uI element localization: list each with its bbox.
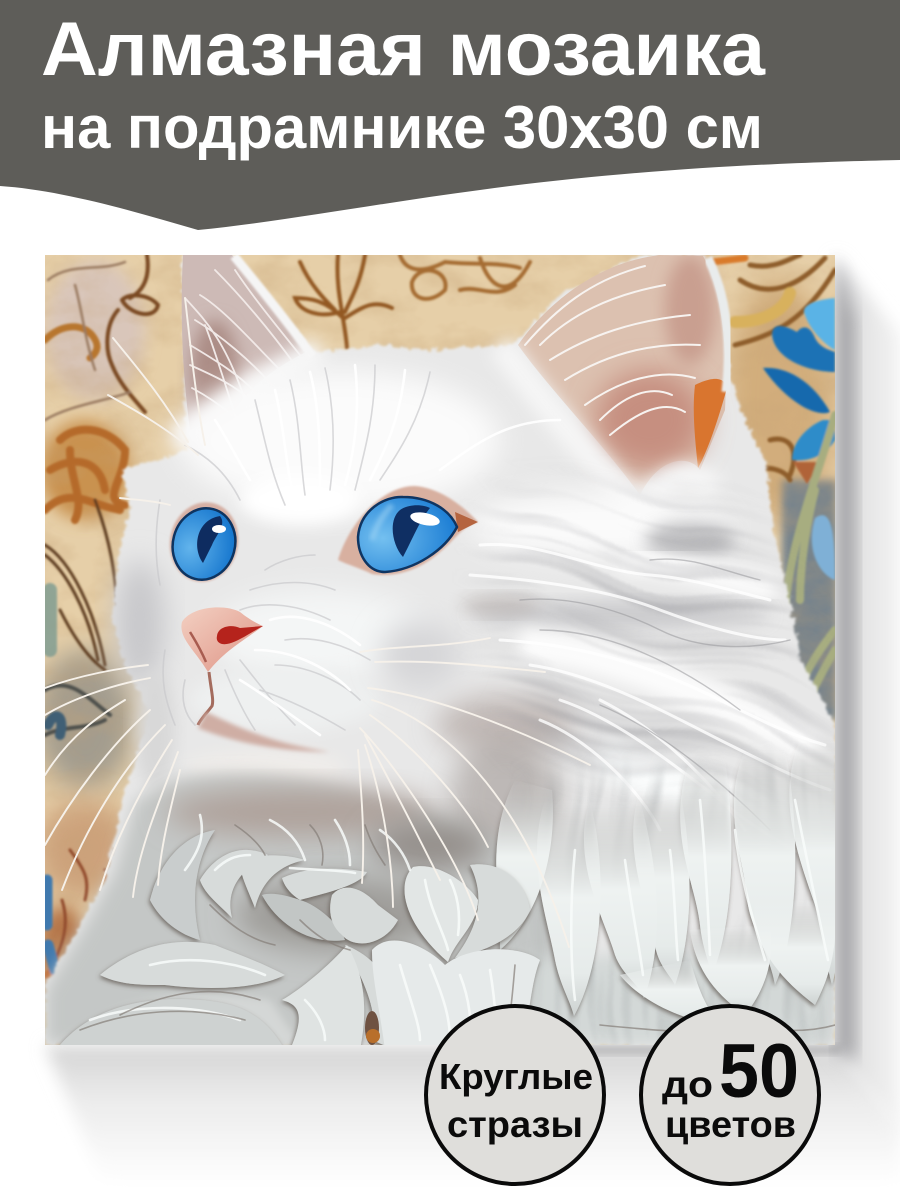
pendant xyxy=(365,1011,380,1045)
canvas drop shadow xyxy=(45,255,900,1200)
vertical streaks xyxy=(549,762,825,1044)
badge: up to 50 colours: 50 xyxy=(719,1029,799,1114)
chest fur xyxy=(45,752,835,1045)
long mane tufts xyxy=(496,740,847,1025)
background floral scrolls xyxy=(45,255,835,995)
badge: up to 50 colours: до xyxy=(662,1064,713,1105)
head fur strands xyxy=(156,365,560,735)
chest tufts xyxy=(60,830,540,1050)
badge: up to 50 colours xyxy=(641,1006,819,1184)
subtitle: на подрамнике 30х30 см xyxy=(41,94,763,161)
header banner xyxy=(0,0,900,230)
blue flowers xyxy=(763,298,835,720)
badge: round rhinestones: Круглые xyxy=(439,1056,593,1097)
whiskers xyxy=(45,298,590,947)
title: Алмазная мозаика xyxy=(41,7,766,92)
painting background xyxy=(35,255,837,1045)
left eye xyxy=(168,501,240,583)
badge: up to 50 colours: цветов xyxy=(665,1104,796,1145)
painting: white cat with blue eyes xyxy=(45,255,835,1045)
nose and mouth xyxy=(181,607,330,752)
badge: round rhinestones xyxy=(426,1006,604,1184)
head and mane shading xyxy=(115,345,835,865)
badge: round rhinestones: стразы xyxy=(447,1104,583,1145)
chest strand highlights xyxy=(80,800,835,1045)
fur texture overlays xyxy=(491,484,835,780)
mane strands xyxy=(470,544,830,865)
left ear xyxy=(182,255,312,430)
right eye xyxy=(338,486,478,575)
cat silhouette xyxy=(45,255,835,1045)
right ear xyxy=(518,255,728,495)
